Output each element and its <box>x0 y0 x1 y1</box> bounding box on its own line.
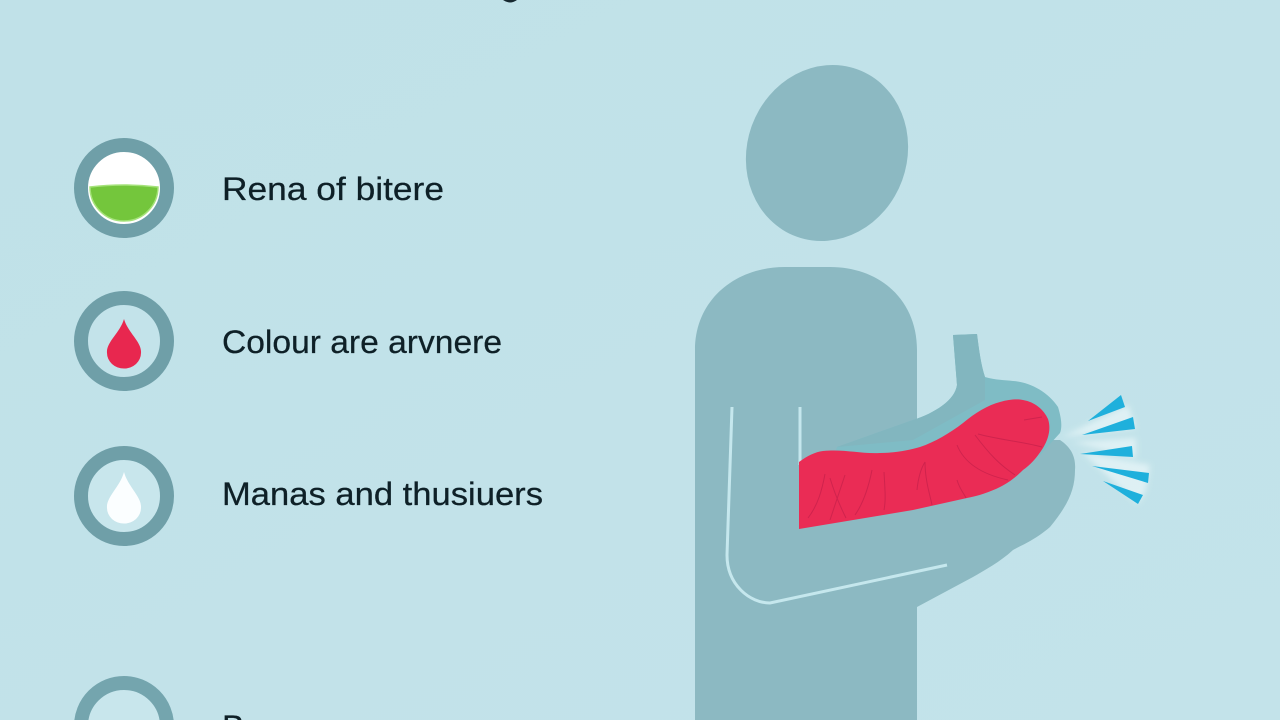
lining folds <box>808 417 1042 520</box>
label: row 2: Colour are arvnere <box>222 324 502 360</box>
head <box>721 42 933 264</box>
label: row 1: Rena of bitere <box>222 171 444 207</box>
red stomach lining <box>799 399 1049 529</box>
icon: white drop <box>81 453 167 539</box>
label: row 3: Manas and thusiuers <box>222 476 543 512</box>
stomach <box>830 334 1061 470</box>
icon: red drop <box>81 298 167 384</box>
stomach inner <box>837 334 985 447</box>
inner arm short line <box>798 407 802 465</box>
body and arm <box>695 267 1075 720</box>
pain burst halo <box>1062 405 1150 504</box>
icon: green level <box>81 145 167 231</box>
title fragment <box>503 0 517 2</box>
icon: cropped fourth ring <box>81 683 167 720</box>
inner arm outline <box>727 407 947 603</box>
pain rays <box>1080 395 1149 504</box>
figure: person with stomach <box>695 42 1150 720</box>
